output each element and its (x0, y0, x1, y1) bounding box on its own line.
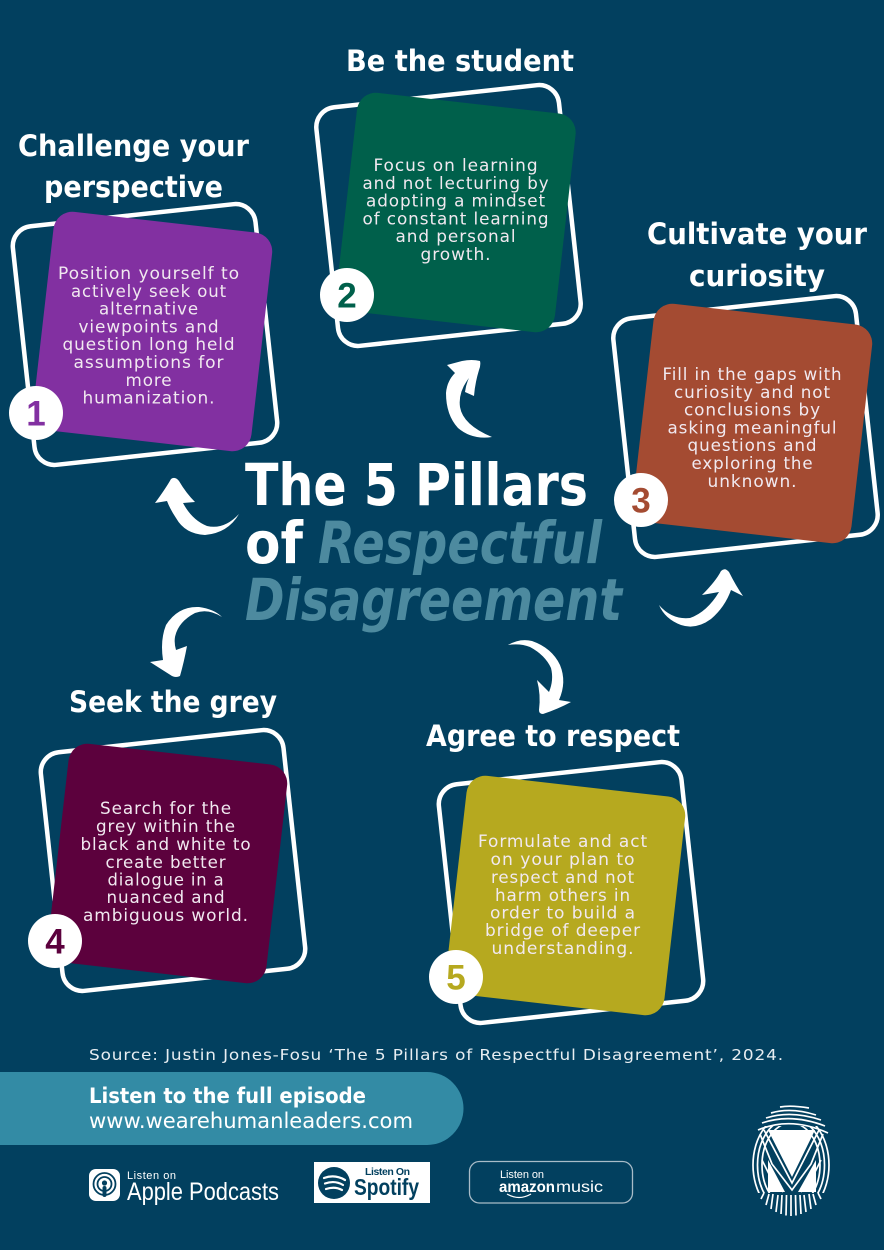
heading: seek the grey: Seek the grey (69, 685, 277, 719)
arrow: to pillar 3 (659, 569, 743, 627)
arrow: to pillar 5 (508, 640, 571, 714)
text: pillar 4 body: create better (106, 853, 226, 872)
banner: listen to the full episode: Listen to the full episode (89, 1084, 366, 1108)
text: pillar 1 body: Position yourself to (58, 264, 240, 283)
arrow: to pillar 2 (446, 360, 492, 438)
text: pillar 3 body: conclusions by (684, 400, 821, 420)
badge: number 4 (28, 914, 82, 968)
badge: number 4: 4 (45, 922, 65, 962)
text: pillar 1 body: humanization. (82, 388, 216, 408)
badge: number 2 (320, 268, 374, 322)
badge: apple podcasts: Apple Podcasts (127, 1178, 279, 1206)
text: pillar 1 body: more (126, 371, 172, 390)
text: pillar 1 body: assumptions for (74, 353, 224, 372)
text: pillar 4 body: ambiguous world. (83, 906, 249, 925)
heading: cultivate your curiosity: Cultivate your (647, 217, 868, 251)
text: pillar 2 body: and personal (396, 227, 516, 246)
title (245, 451, 624, 634)
heading: cultivate your curiosity (647, 217, 868, 293)
badge: spotify: Spotify (354, 1174, 419, 1200)
badge: spotify (314, 1162, 430, 1203)
heading: cultivate your curiosity: curiosity (689, 259, 825, 293)
badge: number 1 (9, 386, 63, 440)
text: pillar 3 body: asking meaningful (668, 418, 838, 438)
badge: number 3 (614, 473, 668, 527)
text: pillar 3 body: curiosity and not (674, 383, 831, 402)
logo: fingerprint M (753, 1106, 829, 1217)
badge: number 1: 1 (26, 394, 46, 434)
panel: pillar 3 cultivate your curiosity (611, 217, 880, 559)
text: pillar 3 body (662, 365, 842, 491)
source line: Source: Justin Jones-Fosu ‘The 5 Pillars of Respectful Disagreement’, 2024. (89, 1046, 784, 1064)
text: pillar 2 body: and not lecturing by (362, 174, 550, 193)
text: pillar 4 body: grey within the (96, 817, 236, 836)
text: pillar 5 body: Formulate and act (478, 832, 648, 851)
arrow: to pillar 1 (155, 478, 239, 535)
banner: listen to the full episode (0, 1072, 464, 1145)
heading: be the student: Be the student (346, 44, 574, 78)
badge: number 2: 2 (337, 276, 357, 316)
heading: agree to respect: Agree to respect (426, 719, 680, 753)
text: pillar 5 body: understanding. (492, 939, 634, 958)
heading: challenge your perspective: perspective (44, 170, 223, 204)
text: pillar 1 body: alternative (99, 300, 199, 318)
title: of (245, 509, 304, 577)
badge: amazon music: music (556, 1179, 603, 1196)
text: pillar 2 body: of constant learning (362, 210, 550, 228)
badge: number 5: 5 (446, 958, 466, 998)
text: pillar 3 body: unknown. (708, 472, 798, 491)
text: pillar 5 body: bridge of deeper (485, 921, 641, 940)
title: Respectful (318, 509, 603, 577)
text: pillar 2 body: growth. (420, 245, 492, 264)
arrow: to pillar 4 (150, 607, 222, 677)
text: pillar 4 body: black and white to (80, 835, 252, 854)
text: pillar 5 body: on your plan to (490, 850, 636, 869)
text: pillar 1 body: viewpoints and (78, 318, 220, 336)
panel: pillar 1 challenge your perspective (9, 129, 279, 467)
badge: apple podcasts (89, 1169, 279, 1206)
banner: listen to the full episode: www.wearehumanleaders.com (89, 1109, 413, 1133)
panel: pillar 5 agree to respect (426, 719, 705, 1025)
panel: pillar 2 be the student (314, 44, 583, 348)
text: pillar 3 body: exploring the (692, 454, 814, 473)
badge: number 5 (429, 950, 483, 1004)
text: pillar 1 body (58, 264, 240, 408)
text: pillar 4 body (80, 799, 252, 925)
badge: spotify: Listen On (365, 1166, 410, 1178)
heading: challenge your perspective: Challenge your (18, 129, 250, 163)
text: pillar 1 body: question long held (62, 335, 236, 354)
badge: amazon music: amazon (499, 1179, 555, 1196)
panel: pillar 4 seek the grey (28, 685, 307, 993)
badge: amazon music (470, 1162, 632, 1203)
text: pillar 3 body: Fill in the gaps with (662, 365, 842, 384)
text: pillar 5 body: order to build a (490, 904, 636, 922)
text: pillar 2 body (362, 156, 550, 264)
badge: amazon music: Listen on (500, 1169, 544, 1181)
badge: number 3: 3 (631, 482, 651, 520)
title: The 5 Pillars (245, 451, 588, 519)
heading: challenge your perspective (18, 129, 250, 204)
text: pillar 1 body: actively seek out (71, 282, 227, 301)
text: pillar 4 body: dialogue in a (108, 870, 224, 890)
text: pillar 5 body: harm others in (495, 886, 631, 905)
badge: apple podcasts: Listen on (127, 1170, 176, 1182)
text: pillar 5 body: respect and not (491, 868, 635, 887)
text: pillar 2 body: Focus on learning (374, 156, 538, 175)
text: pillar 4 body: Search for the (100, 799, 232, 818)
text: pillar 4 body: nuanced and (106, 888, 226, 907)
text: pillar 5 body (478, 832, 648, 958)
text: pillar 2 body: adopting a mindset (366, 192, 546, 210)
title: Disagreement (245, 566, 624, 634)
text: pillar 3 body: questions and (688, 436, 818, 455)
